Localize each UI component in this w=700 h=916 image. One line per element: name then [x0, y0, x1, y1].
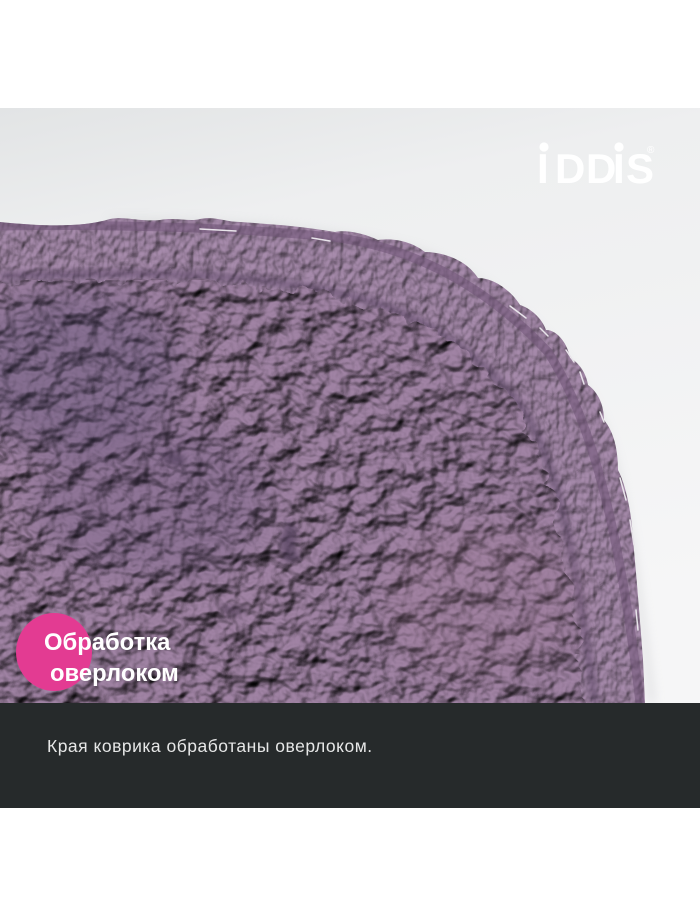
heading: оверлоком — [50, 660, 179, 687]
pink circle — [16, 613, 92, 691]
product photo: purple bath mat corner with overlock edge — [0, 108, 700, 808]
badge: pink circle with heading — [16, 613, 179, 691]
outer beaded edge — [0, 226, 640, 703]
white overlock thread — [200, 229, 638, 630]
logo: IDDIS: IDDIS — [537, 145, 654, 192]
pile — [0, 279, 590, 740]
deep crevices — [280, 520, 302, 562]
crease between rim and pile — [0, 274, 595, 703]
tonal zones — [0, 290, 180, 450]
overlock rim — [0, 210, 660, 710]
mat — [0, 218, 645, 703]
heading: Обработка — [44, 629, 170, 656]
mat soft shadow — [110, 222, 652, 703]
photo background — [0, 108, 700, 703]
description text: Края коврика обработаны оверлоком. — [47, 736, 373, 756]
bottom dark band — [0, 703, 700, 808]
heading — [44, 629, 179, 687]
logo: IDDIS: ® — [647, 145, 655, 156]
